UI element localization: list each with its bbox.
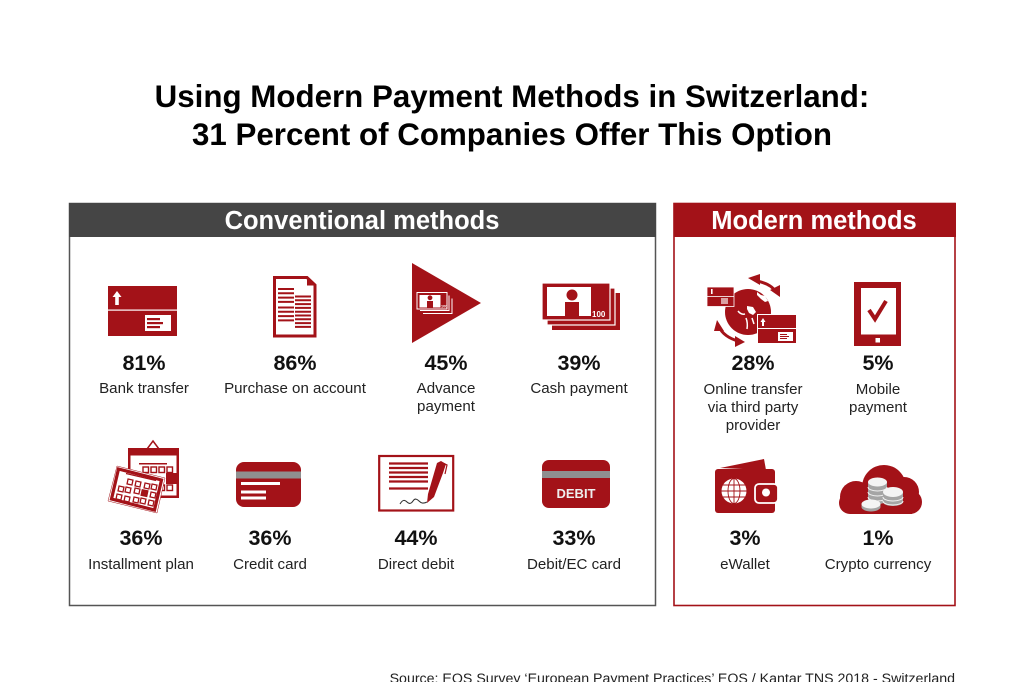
title	[155, 79, 869, 152]
stat: direct debit: Direct debit	[378, 556, 455, 573]
icon: cash payment: 100	[592, 310, 606, 319]
stat: eWallet	[720, 526, 771, 573]
stat: online transfer: Online transfer	[704, 381, 802, 398]
stat: mobile payment: payment	[849, 399, 908, 416]
icon: crypto currency cloud	[839, 465, 922, 514]
stat: credit card: Credit card	[233, 556, 307, 573]
stat: eWallet: 3%	[729, 526, 761, 550]
stat: debit/EC card	[527, 526, 621, 573]
stat: online transfer: via third party	[708, 399, 799, 416]
stat: debit/EC card: 33%	[552, 526, 596, 550]
icon: installment plan calendars	[108, 441, 179, 513]
icon: online transfer globe	[707, 274, 796, 347]
stat: mobile payment: Mobile	[856, 381, 900, 398]
stat: credit card: 36%	[248, 526, 292, 550]
arrow: top cycle	[748, 274, 780, 297]
heading: conventional methods: Conventional methods	[225, 207, 499, 235]
stat: purchase on account: Purchase on account	[224, 380, 367, 397]
stat: purchase on account: 86%	[273, 351, 317, 375]
stat: online transfer	[704, 351, 802, 434]
panel: conventional methods	[69, 203, 656, 606]
title: Using Modern Payment Methods in Switzerland:	[155, 79, 869, 114]
stat: advance payment: 45%	[424, 351, 468, 375]
icon: mobile tablet	[854, 282, 901, 346]
stat: bank transfer	[99, 351, 189, 397]
icon: cash payment	[542, 283, 620, 330]
arrow: bottom cycle	[714, 320, 745, 347]
icon: debit card: DEBIT	[556, 486, 596, 501]
stat: online transfer: provider	[726, 417, 780, 434]
icon: advance payment: 100	[441, 304, 447, 308]
icon: direct debit form	[379, 456, 453, 510]
stat: crypto currency: 1%	[862, 526, 894, 550]
icon: credit card	[236, 462, 301, 507]
icon: eWallet	[715, 459, 778, 513]
stat: purchase on account	[224, 351, 367, 397]
heading: modern methods: Modern methods	[711, 207, 917, 235]
stat: online transfer: 28%	[731, 351, 775, 375]
icon: advance payment	[412, 263, 481, 343]
title: 31 Percent of Companies Offer This Option	[192, 117, 832, 152]
panel: modern methods	[674, 203, 956, 606]
icon: debit card	[542, 460, 610, 508]
heading: conventional methods	[69, 203, 656, 237]
stat: cash payment	[530, 351, 628, 397]
stat: advance payment	[417, 351, 476, 415]
stat: mobile payment	[849, 351, 908, 416]
stat: advance payment: Advance	[417, 380, 475, 397]
stat: installment plan	[88, 526, 194, 573]
stat: advance payment: payment	[417, 398, 476, 415]
stat: crypto currency	[825, 526, 932, 573]
stat: mobile payment: 5%	[862, 351, 894, 375]
stat: eWallet: eWallet	[720, 556, 771, 573]
stat: installment plan: Installment plan	[88, 556, 194, 573]
stat: crypto currency: Crypto currency	[825, 556, 932, 573]
stat: direct debit: 44%	[394, 526, 438, 550]
stat: bank transfer: 81%	[122, 351, 166, 375]
stat: debit/EC card: Debit/EC card	[527, 556, 621, 573]
icon: bank transfer	[108, 286, 177, 336]
stat: bank transfer: Bank transfer	[99, 380, 189, 397]
stat: cash payment: 39%	[557, 351, 601, 375]
heading: modern methods	[674, 203, 956, 237]
icon: purchase on account document	[274, 277, 316, 336]
stat: cash payment: Cash payment	[530, 380, 628, 397]
stat: direct debit	[378, 526, 455, 573]
stat: installment plan: 36%	[119, 526, 163, 550]
stat: credit card	[233, 526, 307, 573]
